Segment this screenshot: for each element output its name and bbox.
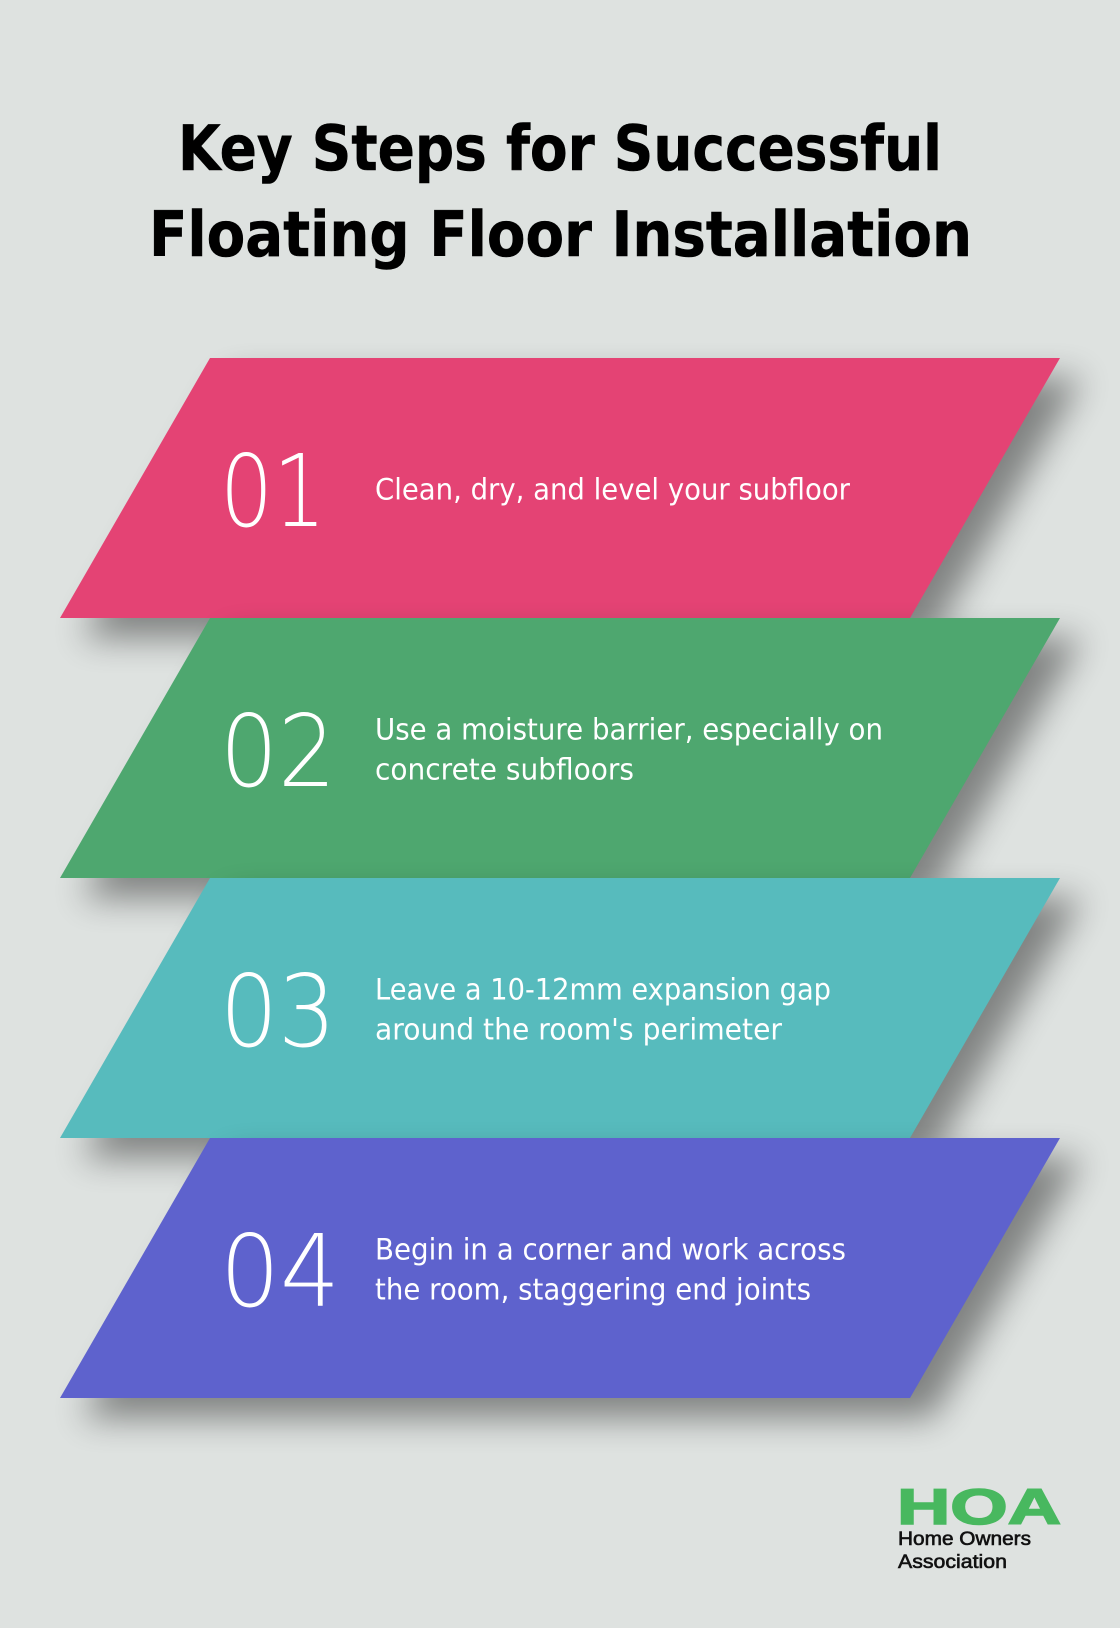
title: Key Steps for Successful xyxy=(178,112,942,185)
step 3 text: around the room's perimeter xyxy=(375,1012,782,1046)
logo: HOA Home Owners Association: Association xyxy=(898,1552,1007,1573)
step 3 band xyxy=(60,878,1082,1158)
step 2 text: concrete subfloors xyxy=(375,752,634,786)
step 4 text: Begin in a corner and work across xyxy=(375,1232,846,1266)
logo: HOA Home Owners Association xyxy=(897,1479,1061,1573)
step 3 text xyxy=(375,972,831,1046)
title xyxy=(149,112,972,271)
step 3 number: 03 xyxy=(220,953,336,1070)
step 1 band xyxy=(60,358,1082,638)
step 2 number: 02 xyxy=(220,693,336,810)
step 4 text xyxy=(375,1232,846,1306)
step 2 text: Use a moisture barrier, especially on xyxy=(375,712,883,746)
logo: HOA Home Owners Association: HOA xyxy=(897,1479,1061,1535)
step 4 text: the room, staggering end joints xyxy=(375,1272,811,1306)
title: Floating Floor Installation xyxy=(149,198,972,271)
logo: HOA Home Owners Association: Home Owners xyxy=(898,1529,1031,1550)
step 2 band xyxy=(60,618,1082,898)
step 1 number: 01 xyxy=(220,433,326,550)
step 1 text: Clean, dry, and level your subfloor xyxy=(375,472,850,506)
step 2 text xyxy=(375,712,883,786)
step 4 band xyxy=(60,1138,1082,1418)
step 4 number: 04 xyxy=(220,1213,340,1330)
step 3 text: Leave a 10-12mm expansion gap xyxy=(375,972,831,1006)
